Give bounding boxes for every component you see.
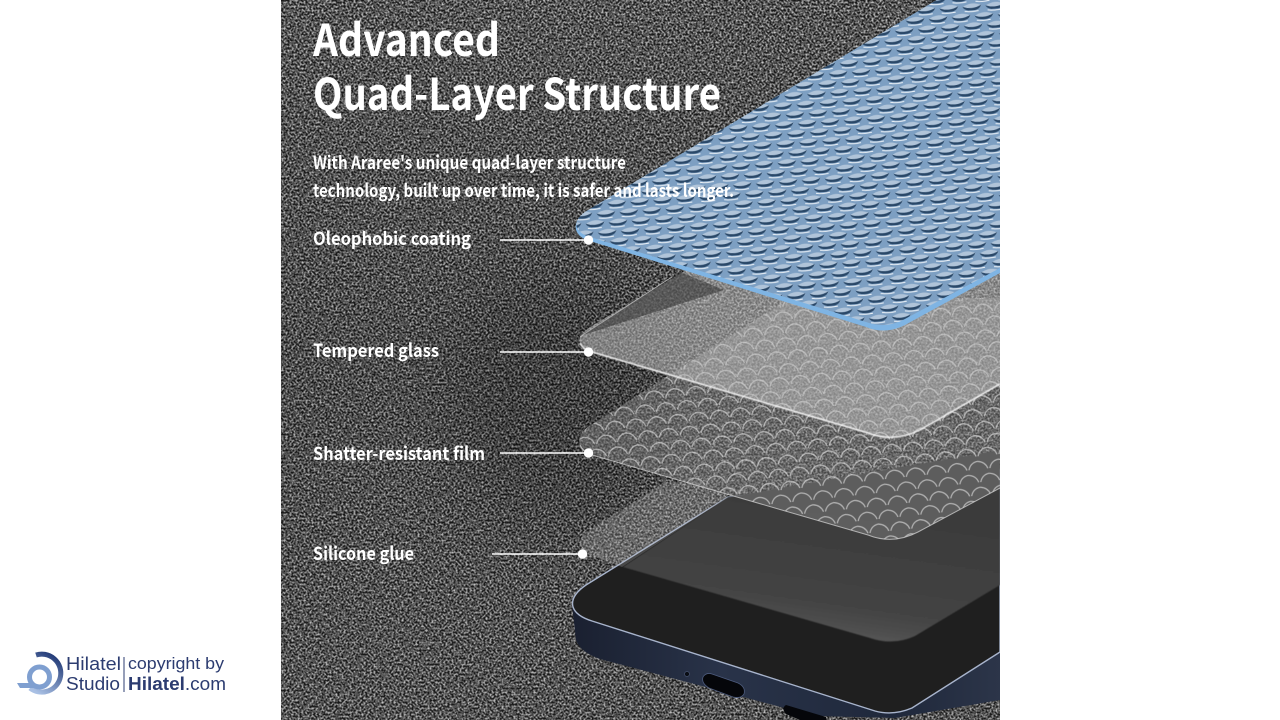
icon: charging port [703,673,744,698]
title [312,20,720,120]
logo wordmark: Hilatel.com [128,674,226,694]
title: Advanced [312,5,500,69]
callout: silicone glue [314,545,588,564]
callout: oleophobic coating [314,230,594,250]
callout: shatter-resistant film [314,445,594,460]
callout: tempered glass: Tempered glass [313,337,439,363]
photo panel: layered screen protector [281,0,1000,720]
description text: technology, built up over time, it is safer and lasts longer. [313,177,734,203]
description text [313,154,733,202]
phone screen [573,470,1000,713]
textured dark background [281,0,1000,720]
icon: microphone hole [684,672,690,676]
logo wordmark: Studio [66,673,120,694]
logo wordmark: Hilatel [66,653,121,674]
icon: speaker slot [784,705,826,720]
description text: With Araree's unique quad-layer structure [313,149,626,175]
watermark logo [17,653,226,694]
title: Quad-Layer Structure [313,59,721,123]
logo wordmark: copyright by [128,654,225,673]
callout: shatter-resistant film: Shatter-resistant film [313,440,485,466]
phone body [572,450,1000,720]
layer: oleophobic coating [576,0,1000,331]
icon: logo rings [17,654,61,692]
callout: silicone glue: Silicone glue [313,540,414,566]
layer: tempered glass [579,268,1000,437]
logo wordmark [66,653,226,694]
silicone glue on screen [623,450,1000,642]
callout: oleophobic coating: Oleophobic coating [313,225,471,251]
layer: silicone glue [580,482,728,567]
layer: shatter-resistant film [579,298,1000,539]
callout: tempered glass [314,342,594,362]
